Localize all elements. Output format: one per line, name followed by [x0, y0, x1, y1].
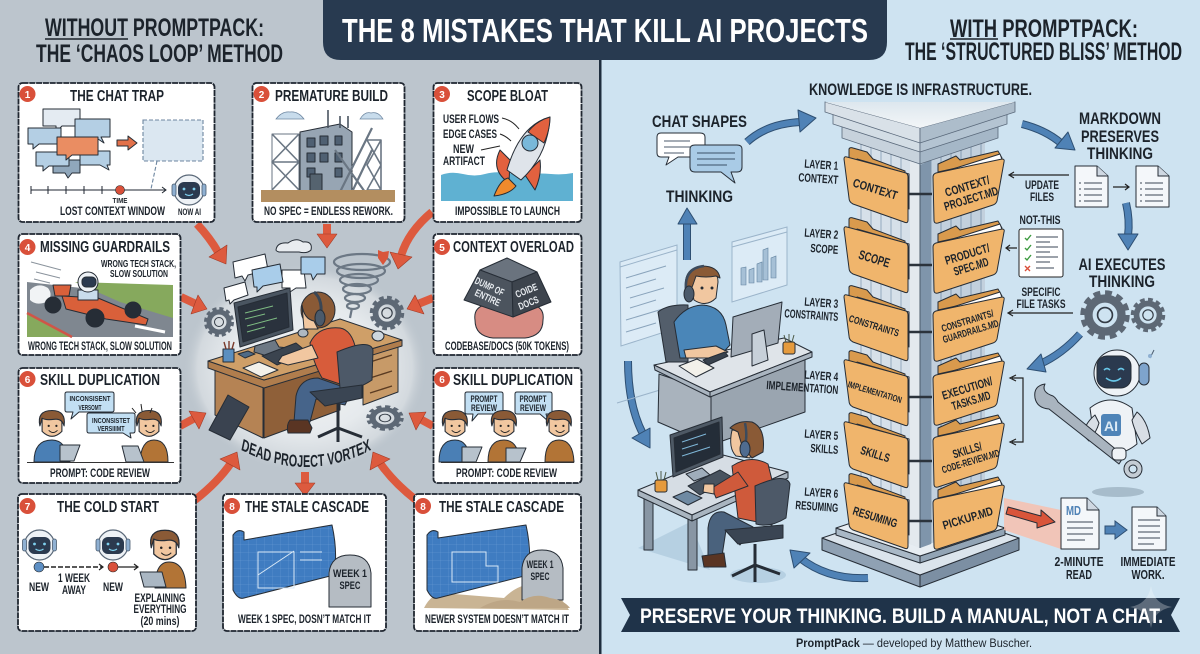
- office chair: [725, 478, 790, 582]
- arrows to rocket: [481, 118, 519, 150]
- layer labels: SCOPE: [810, 241, 839, 257]
- icon: robot with wrench: [1035, 350, 1154, 497]
- icon: brain: [475, 304, 543, 338]
- folder: implementation: [844, 351, 909, 426]
- arrow 2: [317, 224, 337, 248]
- heading: THE STALE CASCADE: [439, 499, 564, 516]
- folder: code-review.md: SKILLS/: [951, 439, 984, 461]
- speech bubbles: [65, 392, 135, 438]
- icon: storm cloud: [276, 240, 311, 253]
- label: immediate work: [1120, 554, 1176, 582]
- folder: tasks.md: TASKS.MD: [950, 388, 992, 413]
- speech bubbles: INCONSISTET: [92, 416, 130, 425]
- label: markdown preserves thinking: [1079, 109, 1161, 163]
- badge 6: [20, 371, 36, 387]
- icon: tombstone: [522, 550, 563, 600]
- caption: PROMPT: CODE REVIEW: [50, 466, 150, 480]
- layer labels: LAYER 5: [804, 427, 839, 443]
- badge 2: 2: [259, 90, 265, 101]
- heading: without promptpack: WITHOUT PROMPTPACK:: [45, 14, 264, 42]
- debris: [424, 584, 569, 610]
- caption: CODEBASE/DOCS (50K TOKENS): [445, 339, 569, 353]
- caption: EXPLAINING: [134, 591, 186, 605]
- card 8: the stale cascade: [223, 494, 386, 631]
- icon: md document: MD: [1066, 503, 1081, 518]
- caption: NEWER SYSTEM DOESN’T MATCH IT: [425, 612, 569, 626]
- annotation: specific file tasks: SPECIFIC: [1022, 285, 1061, 299]
- debris front: [480, 596, 570, 608]
- icons: chaotic chat bubbles: [224, 254, 325, 304]
- capital: [825, 102, 1015, 164]
- folder: skills: SKILLS: [859, 443, 892, 465]
- speech bubbles: INCONSISENT: [70, 394, 111, 403]
- card 3: scope bloat: [434, 83, 582, 222]
- folder: scope: SCOPE: [857, 247, 892, 271]
- illustration: developer at standing desk: [617, 266, 812, 445]
- icon: blueprint: [233, 525, 336, 598]
- badge 6: [434, 371, 450, 387]
- floor shadow: [638, 522, 786, 583]
- arrow: down left: [628, 361, 650, 448]
- arrow: up to thinking: [678, 208, 697, 260]
- label: chat shapes: CHAT SHAPES: [652, 112, 747, 131]
- badge 5: [434, 239, 450, 255]
- timeline labels: NEW: [29, 580, 49, 594]
- badge 1: [20, 86, 36, 102]
- speech bubbles: VERSOMT: [78, 403, 102, 412]
- arrow 8 right: [370, 452, 416, 500]
- folder: spec.md: SPEC.MD: [952, 255, 991, 279]
- layer labels: LAYER 2: [804, 226, 839, 242]
- icon: robot: [22, 530, 56, 560]
- layer labels: LAYER 1: [804, 157, 839, 173]
- badge 8: [415, 498, 431, 514]
- icon: robot: [172, 175, 206, 205]
- timeline: [31, 186, 166, 194]
- road scene: [27, 262, 173, 337]
- panel: right background: [600, 0, 1200, 654]
- monitor: [731, 302, 782, 366]
- heading: with promptpack: WITH PROMPTPACK:: [950, 15, 1138, 43]
- arrow 1: [197, 224, 227, 264]
- keyboard and stationery: [223, 329, 384, 377]
- timeline labels: NEW: [103, 580, 123, 594]
- person: [658, 266, 730, 362]
- arrow: gears to robot: [1027, 334, 1080, 372]
- arrow 3: [390, 212, 432, 269]
- heading: PREMATURE BUILD: [275, 88, 388, 105]
- layer labels: LAYER 6: [804, 485, 839, 501]
- time label: TIME: [112, 196, 128, 205]
- icons: clouds: [276, 112, 383, 119]
- heading: MISSING GUARDRAILS: [40, 239, 170, 256]
- person: [702, 422, 777, 567]
- icons: documents: [1075, 166, 1169, 207]
- labels: ARTIFACT: [443, 154, 485, 168]
- arrows: causes into vortex: [180, 212, 433, 500]
- credit: PromptPack — developed by Matthew Buscher.: [796, 636, 1032, 650]
- folder: resuming: [844, 474, 909, 549]
- base: [822, 500, 1019, 587]
- card 2: premature build: [252, 83, 404, 222]
- people with laptops: [27, 404, 174, 462]
- card 6: skill duplication right: [434, 368, 582, 483]
- folder: tasks.md: [933, 353, 1004, 425]
- heading: without promptpack: [36, 14, 283, 68]
- panel: code window: [620, 245, 677, 346]
- layer labels: LAYER 4: [804, 368, 839, 384]
- icon: gears: [1084, 294, 1163, 336]
- layer labels: SKILLS: [810, 441, 839, 457]
- speech bubbles: REVIEW: [471, 403, 497, 413]
- badge 5: 5: [439, 243, 445, 254]
- beam: pickup to md: [1004, 498, 1061, 549]
- label: 2-minute read: READ: [1066, 567, 1092, 582]
- arrow: markdown to AI: [1118, 203, 1138, 250]
- icon: tombstone: WEEK 1: [526, 559, 554, 571]
- caption: (20 mins): [140, 614, 180, 628]
- block labels: [473, 276, 541, 313]
- arrows: workflow loop: [628, 110, 1138, 578]
- arrow 7: [195, 452, 240, 500]
- heading: SKILL DUPLICATION: [40, 372, 160, 389]
- person explaining: [140, 530, 186, 588]
- caption: PROMPT: CODE REVIEW: [456, 466, 557, 480]
- folder: project.md: PROJECT.MD: [942, 184, 1000, 214]
- labels: [443, 112, 499, 168]
- heading: THE CHAT TRAP: [70, 88, 164, 105]
- arrow: pickup to read: [1006, 507, 1055, 528]
- caption: [134, 591, 186, 628]
- caption: NO SPEC = ENDLESS REWORK.: [264, 204, 393, 218]
- block labels: ENTIRE: [473, 288, 502, 309]
- label: 2-minute read: 2-MINUTE: [1054, 554, 1104, 569]
- folder: constraints: CONSTRAINTS: [847, 314, 900, 340]
- folder: spec.md: [933, 221, 1004, 293]
- label: immediate work: WORK.: [1132, 567, 1164, 582]
- icon: fallen clipboard: [209, 395, 249, 440]
- caption: IMPOSSIBLE TO LAUNCH: [455, 204, 560, 218]
- annotation: specific file tasks: [1008, 285, 1073, 316]
- arrow: read to work: [1105, 521, 1127, 539]
- annotation: not-this checklist: NOT-THIS: [1020, 213, 1060, 227]
- timeline labels: 1 WEEK: [58, 571, 90, 585]
- heading: THE COLD START: [57, 499, 159, 516]
- speech bubbles: PROMPT: [470, 394, 498, 404]
- folder: code-review.md: CODE-REVIEW.MD: [941, 448, 1001, 476]
- banner: [621, 598, 1180, 632]
- folder: guardrails.md: CONSTRAINTS/: [940, 308, 995, 335]
- badge 7: 7: [25, 502, 31, 513]
- card 8: the stale cascade right: [414, 494, 581, 631]
- icon: broken gear: [369, 407, 401, 429]
- block labels: DOCS: [517, 295, 541, 313]
- right folders: [933, 151, 1004, 549]
- icon: tombstone: WEEK 1: [333, 568, 367, 580]
- curved path label: DEAD PROJECT VORTEX: [242, 438, 372, 467]
- card 4: missing guardrails: [18, 234, 180, 355]
- arrow 8: [295, 472, 315, 496]
- label: markdown preserves thinking: PRESERVES: [1081, 127, 1159, 146]
- folder: pickup.md: [933, 477, 1004, 549]
- icon: gear left: [206, 309, 232, 335]
- caption: LOST CONTEXT WINDOW: [60, 204, 165, 218]
- heading: knowledge is infrastructure: KNOWLEDGE IS INFRASTRUCTURE.: [809, 80, 1032, 99]
- annotation: specific file tasks: FILE TASKS: [1016, 297, 1066, 311]
- label: AI executes thinking: AI EXECUTES: [1078, 255, 1166, 274]
- annotation: not-this checklist: [1006, 213, 1063, 277]
- people with laptops: [439, 410, 574, 462]
- caption: now ai: NOW AI: [178, 207, 201, 217]
- icon: blueprint: [427, 525, 530, 598]
- icon: robot with wrench: AI: [1104, 418, 1118, 434]
- arrow 5: [407, 295, 433, 314]
- icon: chat bubble pile: [28, 109, 110, 178]
- icon: arrow: [117, 136, 137, 150]
- unfinished building: [272, 110, 381, 192]
- desk: [208, 319, 402, 438]
- layer labels: [766, 157, 839, 515]
- icon: rocket: [494, 117, 550, 196]
- icon: race car: [45, 272, 148, 327]
- folder: code-review.md: [933, 415, 1004, 487]
- monitor: [670, 417, 723, 481]
- caption: WRONG TECH STACK, SLOW SOLUTION: [28, 339, 172, 353]
- heading: with promptpack: [905, 15, 1182, 66]
- icon: tombstone: [329, 555, 371, 607]
- title: THE 8 MISTAKES THAT KILL AI PROJECTS: [342, 12, 868, 49]
- arrow: base to developer: [790, 550, 868, 578]
- arrow: column to markdown: [1022, 124, 1075, 150]
- icon: document: [1132, 507, 1166, 550]
- annotation: update files: UPDATE: [1025, 178, 1059, 192]
- icon: robot: [96, 530, 130, 560]
- speech bubbles: VERSIIIMT: [98, 424, 125, 433]
- icon: gear right: [372, 298, 402, 328]
- card 5: context overload: [434, 234, 582, 355]
- folder: implementation: IMPLEMENTATION: [847, 379, 903, 405]
- icon: debris scrap: [378, 250, 389, 265]
- badge 1: 1: [25, 90, 31, 101]
- ground: [261, 190, 395, 202]
- card 6: skill duplication left: [18, 368, 180, 483]
- computer monitor: [234, 288, 293, 356]
- badge 7: [20, 498, 36, 514]
- badge 4: [20, 239, 36, 255]
- icon: md document: [1061, 498, 1099, 549]
- label: immediate work: IMMEDIATE: [1120, 554, 1176, 569]
- arrow 4: [181, 295, 207, 314]
- heading: without promptpack: THE ‘CHAOS LOOP’ METHOD: [36, 40, 283, 68]
- badge 3: [434, 86, 450, 102]
- heading: CONTEXT OVERLOAD: [453, 239, 574, 256]
- label: markdown preserves thinking: THINKING: [1087, 144, 1153, 163]
- arrow 6 left: [180, 411, 206, 429]
- heading: SKILL DUPLICATION: [453, 372, 573, 389]
- label: thinking: THINKING: [666, 187, 733, 206]
- folder: context: [844, 148, 909, 223]
- person: frustrated developer: [278, 292, 356, 433]
- folder: guardrails.md: GUARDRAILS.MD: [942, 318, 1000, 346]
- labels: EDGE CASES: [443, 127, 497, 141]
- heading: SCOPE BLOAT: [467, 88, 548, 105]
- card 7: the cold start: [18, 494, 196, 631]
- icon: tombstone: SPEC: [340, 580, 361, 592]
- label: AI executes thinking: [1078, 255, 1166, 291]
- labels: USER FLOWS: [443, 112, 499, 126]
- panel: left background: [0, 0, 600, 654]
- folder: tasks.md: EXECUTION/: [940, 374, 995, 403]
- heading: THE STALE CASCADE: [245, 499, 369, 516]
- desk: [654, 338, 812, 445]
- badge 8: [224, 498, 240, 514]
- icon: tombstone: SPEC: [530, 571, 550, 583]
- speech bubbles: [465, 392, 552, 421]
- badge 3: 3: [439, 90, 445, 101]
- folder: constraints: [844, 286, 909, 361]
- office chair: [310, 344, 373, 442]
- callout: WRONG TECH STACK,: [101, 259, 176, 270]
- keyboard and notes: [679, 352, 728, 377]
- pen cup: [655, 471, 667, 492]
- arrow 6 right: [409, 412, 433, 430]
- layer labels: IMPLEMENTATION: [766, 378, 839, 397]
- column: knowledge pillar: [822, 102, 1019, 587]
- arrow: chat to column: [747, 110, 816, 142]
- layer labels: CONSTRAINTS: [784, 306, 839, 324]
- label: markdown preserves thinking: MARKDOWN: [1079, 109, 1161, 128]
- annotation: update files: [1009, 172, 1069, 204]
- layer labels: LAYER 3: [804, 295, 839, 311]
- folder: spec.md: PRODUCT/: [943, 241, 992, 268]
- illustration: developer at small desk: [638, 417, 790, 583]
- panel: chart window: [732, 227, 787, 302]
- hinges: [908, 194, 932, 521]
- callout: [101, 259, 176, 280]
- badge 6: 6: [439, 375, 445, 386]
- folder: guardrails.md: [933, 289, 1004, 361]
- label: AI executes thinking: THINKING: [1089, 272, 1155, 291]
- speech bubbles: REVIEW: [520, 403, 546, 413]
- card 1: the chat trap: [18, 83, 214, 222]
- bracket: [1010, 375, 1023, 445]
- badge 8: 8: [420, 502, 426, 513]
- annotation: update files: FILES: [1030, 190, 1054, 204]
- center divider: [599, 58, 602, 654]
- speech bubbles: PROMPT: [520, 394, 547, 404]
- badge 8: 8: [229, 502, 235, 513]
- caption: WEEK 1 SPEC, DOSN’T MATCH IT: [238, 612, 371, 626]
- label: 2-minute read: [1054, 554, 1104, 582]
- caption: EVERYTHING: [134, 602, 186, 616]
- folder: context: CONTEXT: [851, 176, 900, 203]
- timeline: [34, 562, 138, 572]
- folder: pickup.md: PICKUP.MD: [941, 504, 995, 532]
- water: [441, 172, 573, 201]
- labels: NEW: [453, 142, 475, 156]
- desk: [638, 455, 788, 570]
- icon: heavy block: [464, 258, 551, 317]
- layer labels: RESUMING: [795, 498, 839, 515]
- central illustration: dead project vortex: [192, 239, 418, 467]
- folder: project.md: [933, 151, 1004, 223]
- left folders: [844, 148, 909, 549]
- shaft: [857, 140, 985, 548]
- badge 4: 4: [25, 243, 31, 254]
- folder: resuming: RESUMING: [851, 504, 899, 531]
- pen cup: [783, 334, 795, 354]
- title: [323, 0, 887, 60]
- folder: skills: [844, 413, 909, 488]
- icon: chat bubbles: [657, 133, 742, 183]
- lost context window: [143, 120, 203, 189]
- block labels: DUMP OF: [473, 276, 505, 299]
- block labels: COIDE: [514, 282, 540, 301]
- badge 6: 6: [25, 375, 31, 386]
- callout: SLOW SOLUTION: [110, 269, 168, 280]
- folder: project.md: CONTEXT/: [943, 173, 992, 200]
- layer labels: CONTEXT: [798, 170, 839, 187]
- icon: tornado: [334, 254, 390, 318]
- keyboard and phone: [673, 470, 732, 505]
- timeline labels: [29, 571, 123, 597]
- timeline labels: AWAY: [62, 583, 86, 597]
- sparkle watermark: [1130, 586, 1172, 628]
- badge 2: [254, 86, 270, 102]
- folder: scope: [844, 218, 909, 293]
